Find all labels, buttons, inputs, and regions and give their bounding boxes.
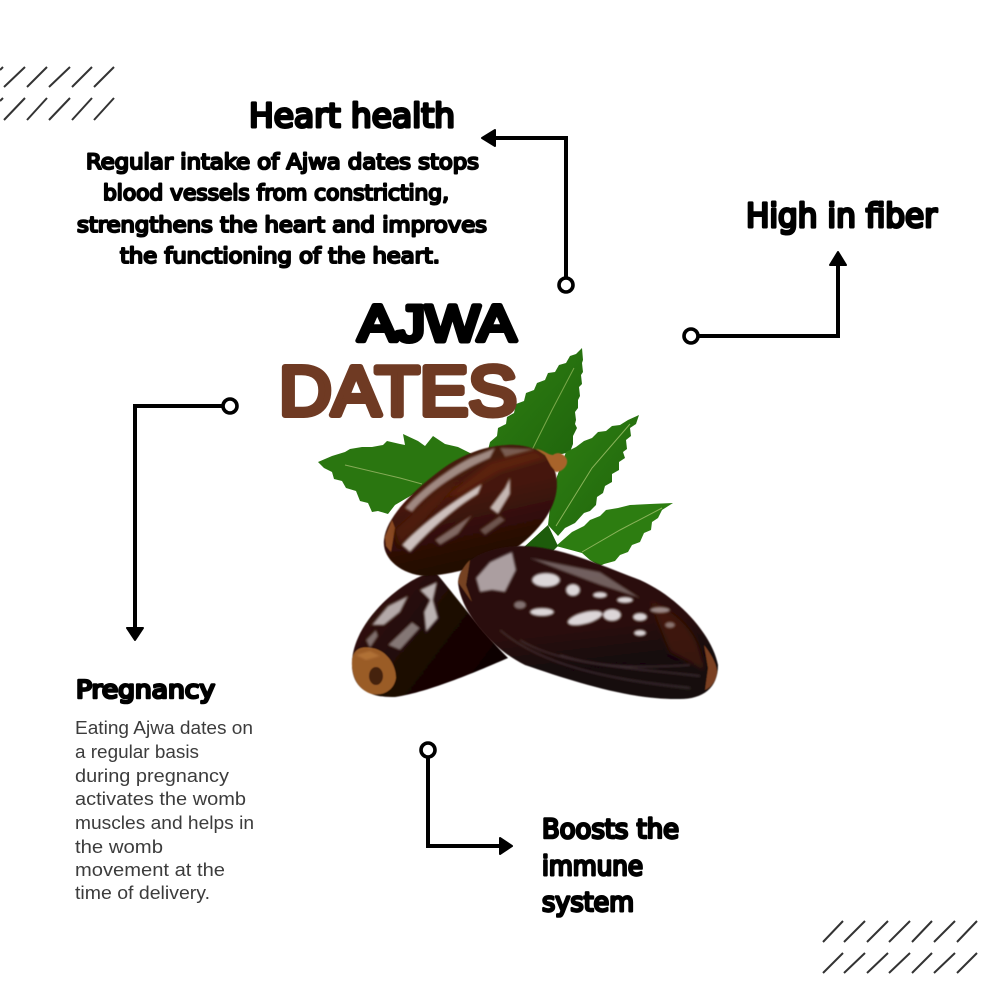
- text block: pregnancy description: a regular basis: [75, 742, 199, 762]
- text block: pregnancy description: during pregnancy: [75, 766, 229, 786]
- heading: High in fiber: High in fiber: [746, 196, 937, 235]
- text block: heart health description: Regular intake of Ajwa dates stops: [86, 150, 479, 175]
- decorative hatch: top left: [0, 67, 114, 120]
- title: AJWA: AJWA: [358, 295, 516, 352]
- date: lower right: [458, 546, 718, 699]
- arrow: to Heart health: [482, 130, 573, 292]
- decorative hatch: bottom right: [823, 921, 977, 973]
- text block: pregnancy description: movement at the: [75, 860, 225, 880]
- arrow: to High in fiber: [684, 252, 846, 343]
- text block: pregnancy description: activates the womb: [75, 789, 246, 809]
- text block: pregnancy description: time of delivery.: [75, 883, 210, 903]
- heading: Boosts the immune system: Boosts the: [542, 814, 679, 845]
- date: lower left: [352, 573, 508, 697]
- date: top: [384, 445, 567, 576]
- text block: heart health description: [77, 150, 487, 269]
- leaf: small centre: [523, 525, 558, 552]
- arrow: to Pregnancy: [127, 399, 237, 640]
- text block: pregnancy description: Eating Ajwa dates on: [75, 718, 253, 738]
- leaf: left: [318, 434, 472, 514]
- arrow: to Boosts the immune system: [421, 743, 512, 854]
- text block: heart health description: blood vessels from constricting,: [103, 181, 449, 206]
- heading: Pregnancy: Pregnancy: [76, 675, 215, 704]
- heading: Boosts the immune system: [542, 814, 679, 918]
- leaf: top: [488, 348, 583, 462]
- text block: heart health description: strengthens the heart and improves: [77, 213, 487, 238]
- heading: Boosts the immune system: immune: [542, 851, 643, 882]
- text block: heart health description: the functioning of the heart.: [120, 244, 440, 269]
- heading: Heart health: Heart health: [249, 96, 455, 135]
- illustration: dates with leaves: [318, 348, 718, 699]
- leaf: lower right: [556, 503, 673, 566]
- heading: Boosts the immune system: system: [542, 887, 634, 918]
- text block: pregnancy description: the womb: [75, 837, 163, 857]
- text block: pregnancy description: [75, 718, 254, 903]
- leaf: right: [548, 415, 639, 536]
- title: DATES: DATES: [279, 352, 517, 430]
- text block: pregnancy description: muscles and helps in: [75, 813, 254, 833]
